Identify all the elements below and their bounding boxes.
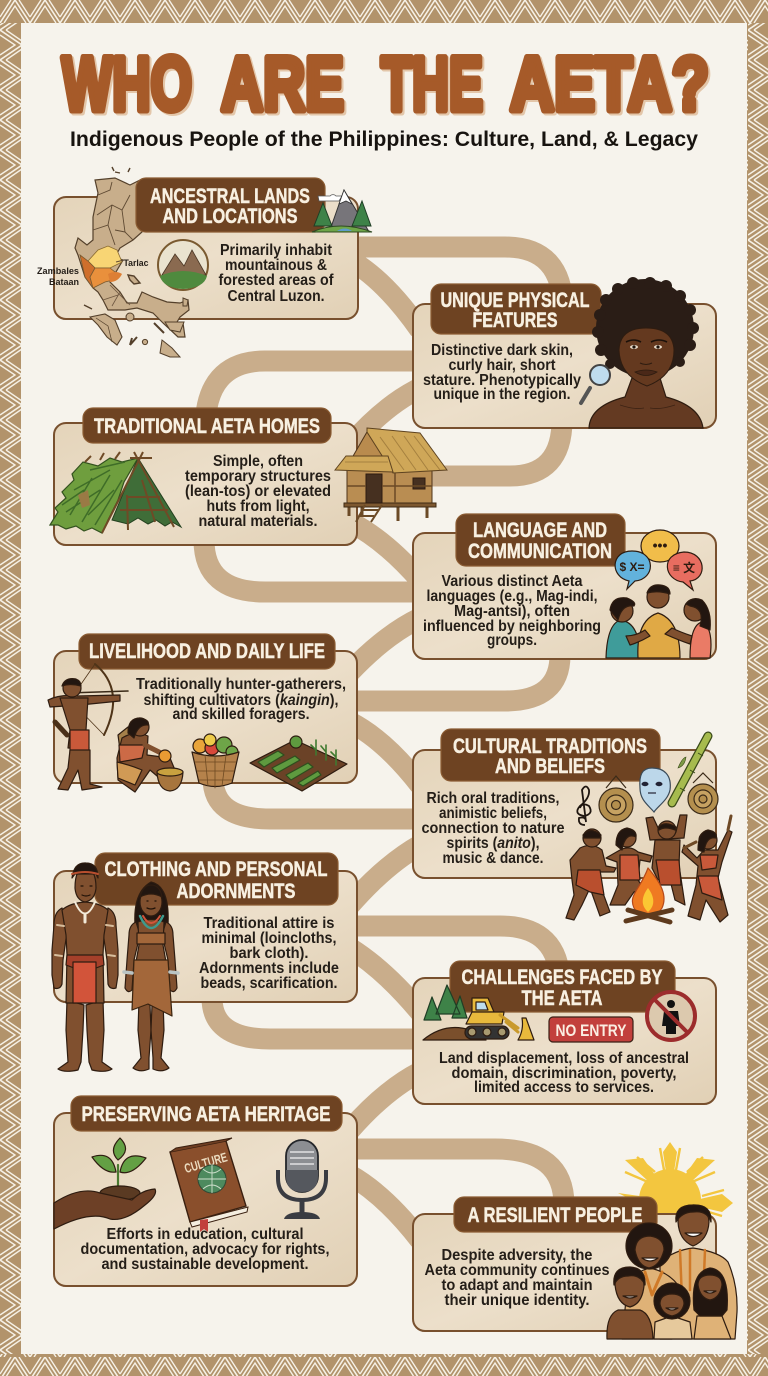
title: WHO [62, 42, 192, 127]
winding path connecting the sections [204, 247, 564, 1240]
text: challenges: limited access to services. [474, 1079, 654, 1096]
text: language: Mag-antsi), often [454, 603, 570, 620]
heading: clothing [95, 853, 338, 905]
text: preserving: documentation, advocacy for rights, [80, 1241, 330, 1258]
map of Luzon: Bataan [49, 277, 79, 287]
title: THE [381, 42, 483, 127]
text: challenges: Land displacement, loss of ancestral [439, 1050, 689, 1067]
title: AETA? [510, 42, 709, 127]
text: resilient: Despite adversity, the [442, 1247, 593, 1264]
icon: microphone [278, 1140, 326, 1219]
heading: challenges: CHALLENGES FACED BY [462, 966, 662, 989]
heading: livelihood: LIVELIHOOD AND DAILY LIFE [89, 640, 325, 663]
text: resilient: Aeta community continues [424, 1262, 610, 1279]
heading: resilient [454, 1197, 657, 1232]
icon: prohibition sign [647, 992, 695, 1040]
panel: traditional Aeta homes [50, 408, 447, 545]
icon: treble clef [577, 786, 591, 825]
icon: anito spirit mask [640, 768, 670, 812]
heading: preserving: PRESERVING AETA HERITAGE [82, 1103, 330, 1126]
heading: language: LANGUAGE AND [473, 519, 607, 542]
icon: hanging gongs [599, 773, 718, 822]
text: ancestral lands: Primarily inhabit [220, 242, 332, 259]
text: homes: Simple, often [213, 453, 303, 470]
text: language: Various distinct Aeta [442, 573, 583, 590]
text: resilient [424, 1247, 610, 1309]
panel: unique physical features [413, 277, 716, 428]
text: clothing: Traditional attire is [204, 915, 334, 932]
text: traditions: connection to nature [422, 820, 565, 837]
text: physical features: stature. Phenotypically [423, 372, 581, 389]
text: homes: (lean-tos) or elevated [185, 483, 331, 500]
heading: physical features [431, 284, 601, 334]
heading: ancestral lands [136, 178, 325, 232]
heading: challenges: THE AETA [522, 987, 602, 1010]
map of Luzon [37, 167, 189, 357]
icon: speech bubbles: ≡ 文 [673, 560, 695, 575]
illustration: man in loincloth [52, 863, 118, 1071]
illustration: trees and bulldozer [423, 985, 534, 1040]
text: traditions: spirits (anito), [446, 835, 540, 852]
text: traditions: music & dance. [442, 850, 544, 867]
portrait of an Aeta person [589, 277, 703, 428]
subtitle: Indigenous People of the Philippines: Culture, Land, & Legacy [70, 127, 698, 151]
map of Luzon: Tarlac [124, 258, 148, 268]
panel: preserving Aeta heritage [54, 1096, 357, 1286]
text: physical features: curly hair, short [448, 357, 556, 374]
heading: homes: TRADITIONAL AETA HOMES [94, 415, 320, 438]
card: challenges [413, 978, 716, 1104]
title: ARE [221, 42, 344, 127]
heading: homes [83, 408, 331, 443]
text: clothing: beads, scarification. [200, 975, 338, 992]
illustration: three people talking [606, 585, 711, 658]
heading: preserving [71, 1096, 342, 1131]
text: resilient: to adapt and maintain [442, 1277, 592, 1294]
heading: challenges [450, 961, 675, 1012]
illustration: lean-to shelter [50, 452, 181, 533]
panel: livelihood and daily life [48, 634, 357, 792]
text: ancestral lands: forested areas of [218, 272, 334, 289]
icon: speech bubbles: ••• [653, 537, 667, 553]
text: homes: temporary structures [185, 468, 331, 485]
illustration: woman in bark skirt [124, 882, 178, 1071]
card: clothing [54, 871, 357, 1002]
sign: no entry: NO ENTRY [556, 1021, 627, 1040]
card: language [413, 533, 716, 659]
text: livelihood: and skilled foragers. [172, 706, 310, 723]
title: THE [383, 44, 485, 129]
text: livelihood [136, 676, 346, 723]
icon: bamboo instrument [672, 736, 708, 803]
card: traditions [413, 750, 716, 878]
icon: hand holding seedling [54, 1138, 156, 1229]
card: preserving [54, 1113, 357, 1286]
text: resilient: their unique identity. [444, 1292, 590, 1309]
icon: speech bubbles [615, 530, 702, 590]
card: physical features [413, 304, 716, 428]
text: clothing [199, 915, 339, 992]
icon: mountain and forest [312, 190, 372, 232]
text: ancestral lands: mountainous & [225, 257, 327, 274]
icon: magnifying glass [581, 365, 610, 403]
heading: clothing: ADORNMENTS [176, 880, 296, 903]
text: ancestral lands: Central Luzon. [228, 288, 324, 305]
text: preserving: and sustainable development. [102, 1256, 308, 1273]
title: WHO [64, 44, 194, 129]
title: AETA? [512, 44, 711, 129]
text: challenges [439, 1050, 689, 1096]
text: homes: huts from light, [206, 498, 310, 515]
map of Luzon: Zambales [37, 266, 79, 276]
panel: language and communication [413, 514, 716, 659]
text: ancestral lands [218, 242, 334, 305]
icon: speech bubbles: $ X= [619, 560, 645, 574]
heading: ancestral lands: AND LOCATIONS [162, 205, 298, 228]
illustration: woman gathering food [117, 718, 183, 792]
illustration: vegetable garden plot [250, 736, 347, 791]
text: language: groups. [487, 632, 537, 649]
card: homes [54, 423, 357, 545]
text: physical features: unique in the region. [434, 386, 570, 403]
text: preserving [80, 1226, 330, 1273]
title [62, 42, 711, 129]
card: ancestral lands [54, 197, 358, 319]
text: homes: natural materials. [198, 513, 318, 530]
card: livelihood [54, 651, 357, 783]
panel: cultural traditions and beliefs [413, 729, 732, 922]
text: homes [185, 453, 331, 530]
heading: resilient: A RESILIENT PEOPLE [468, 1204, 642, 1227]
heading: language: COMMUNICATION [468, 540, 612, 563]
text: preserving: Efforts in education, cultural [106, 1226, 304, 1243]
text: language: languages (e.g., Mag-indi, [426, 588, 598, 605]
text: challenges: domain, discrimination, poverty, [452, 1065, 676, 1082]
heading: traditions: AND BELIEFS [495, 755, 605, 778]
illustration: dancers around campfire [566, 815, 732, 922]
title: ARE [223, 44, 346, 129]
heading: physical features: FEATURES [472, 309, 558, 332]
text: clothing: bark cloth). [230, 945, 308, 962]
heading: language [456, 514, 625, 566]
text: language: influenced by neighboring [423, 618, 601, 635]
heading: traditions [441, 729, 660, 781]
heading: physical features: UNIQUE PHYSICAL [440, 289, 590, 312]
icon: culture book: CULTURE [183, 1149, 229, 1176]
sign: no entry [549, 1017, 633, 1042]
text: language [423, 573, 601, 649]
text: clothing: minimal (loincloths, [202, 930, 336, 947]
text: livelihood: Traditionally hunter-gatherers, [136, 676, 346, 693]
illustration: stilt hut [335, 428, 447, 522]
heading: ancestral lands: ANCESTRAL LANDS [150, 185, 310, 208]
icon: Philippine sun [618, 1142, 733, 1231]
text: traditions: animistic beliefs, [439, 805, 547, 822]
panel: ancestral lands and locations [37, 167, 372, 357]
illustration: hunter with bow [48, 664, 128, 790]
illustration: Aeta family [607, 1205, 737, 1339]
heading: traditions: CULTURAL TRADITIONS [453, 735, 647, 758]
icon: culture book [170, 1138, 248, 1232]
heading: livelihood [79, 634, 335, 669]
text: physical features [423, 342, 581, 403]
text: traditions [422, 790, 565, 867]
text: livelihood: shifting cultivators (kaingin), [144, 692, 338, 709]
text: physical features: Distinctive dark skin, [431, 342, 573, 359]
text: traditions: Rich oral traditions, [426, 790, 560, 807]
card: resilient [413, 1214, 716, 1331]
heading: clothing: CLOTHING AND PERSONAL [104, 858, 328, 881]
panel: clothing and personal adornments [52, 853, 357, 1071]
icon: mountain badge [158, 240, 208, 290]
panel: a resilient people [413, 1142, 737, 1339]
text: clothing: Adornments include [199, 960, 339, 977]
panel: challenges faced by the Aeta [413, 961, 716, 1104]
illustration: basket of produce [192, 734, 239, 788]
